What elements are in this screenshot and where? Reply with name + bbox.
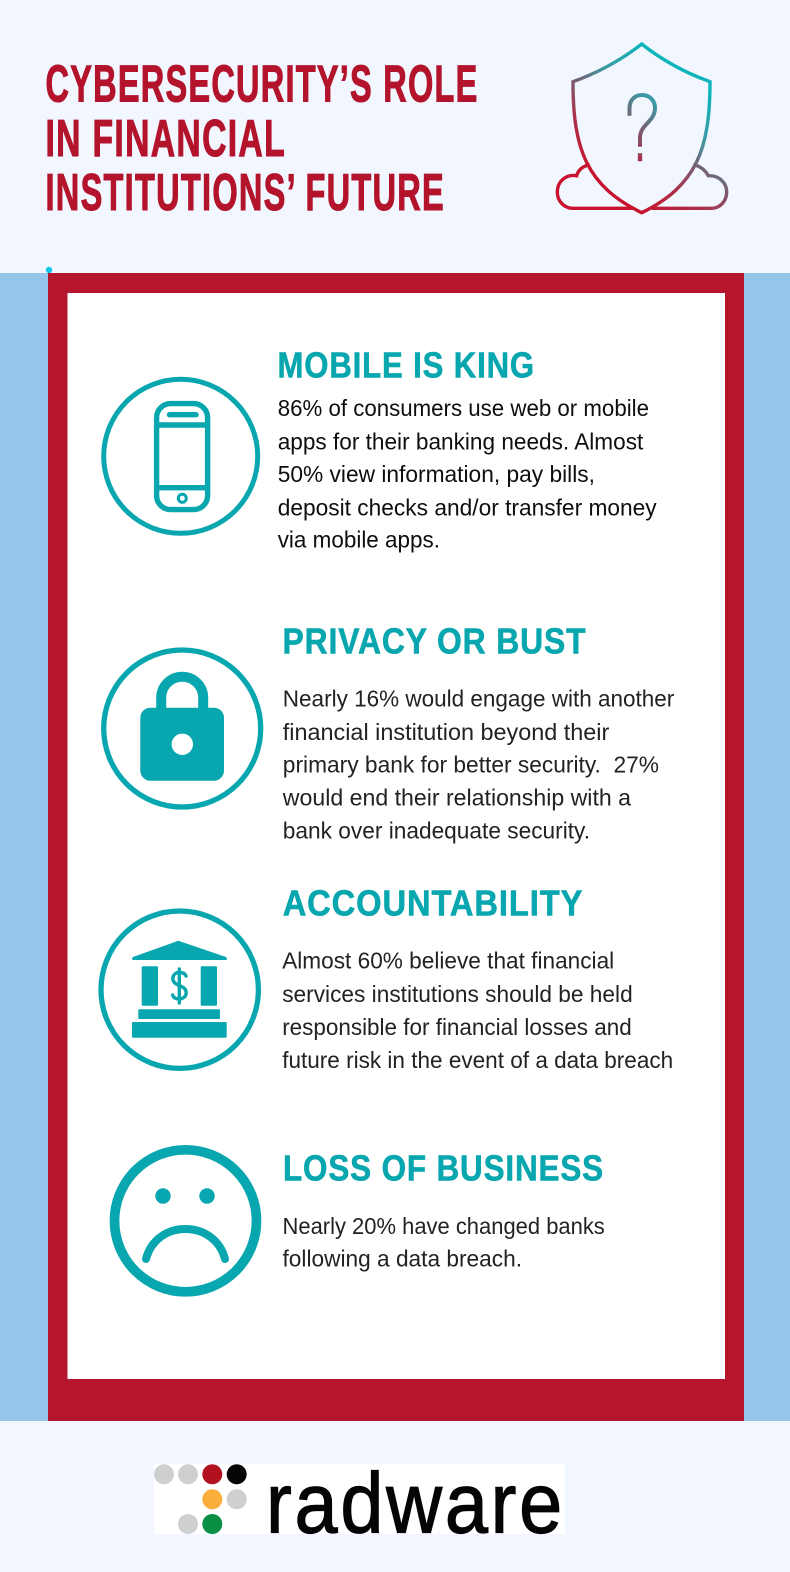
panel: mobile is king [104, 345, 657, 553]
body text [278, 395, 657, 553]
body text: services institutions should be held [282, 981, 633, 1007]
panel: privacy or bust [104, 620, 675, 844]
body text [282, 686, 675, 844]
title [46, 56, 478, 222]
logo: radware [154, 1456, 565, 1552]
icon: padlock [104, 650, 261, 807]
heading: ACCOUNTABILITY [283, 883, 583, 924]
heading: PRIVACY OR BUST [282, 620, 586, 661]
body text: primary bank for better security. 27% [283, 752, 659, 778]
body text: 50% view information, pay bills, [278, 461, 595, 487]
body text: financial institution beyond their [283, 719, 610, 745]
heading: MOBILE IS KING [278, 345, 535, 386]
panel: loss of business [114, 1148, 605, 1292]
body text [282, 948, 673, 1073]
body text [282, 1213, 605, 1272]
logo: radware: radware [266, 1456, 565, 1552]
body text: via mobile apps. [278, 527, 440, 553]
body text: future risk in the event of a data breach [282, 1047, 673, 1073]
body text: bank over inadequate security. [283, 818, 590, 844]
body text: Almost 60% believe that financial [282, 948, 614, 974]
white content panel [68, 293, 725, 1379]
heading: LOSS OF BUSINESS [283, 1148, 604, 1189]
decorative dot [46, 267, 52, 273]
body text: would end their relationship with a [282, 785, 631, 811]
red frame [48, 273, 744, 1421]
body text: 86% of consumers use web or mobile [278, 395, 649, 421]
title: INSTITUTIONS’ FUTURE [46, 164, 445, 222]
icon: bank building [101, 911, 258, 1068]
body text: deposit checks and/or transfer money [278, 494, 657, 520]
side band left [0, 273, 48, 1421]
side band right [744, 273, 790, 1421]
body text: apps for their banking needs. Almost [278, 428, 644, 454]
icon: mobile phone [104, 379, 258, 533]
body text: following a data breach. [282, 1246, 522, 1272]
title: IN FINANCIAL [46, 110, 286, 168]
panel: accountability [101, 883, 673, 1073]
icon: shield with question mark and clouds [557, 44, 727, 213]
title: CYBERSECURITY’S ROLE [46, 56, 478, 114]
body text: responsible for financial losses and [282, 1014, 632, 1040]
icon: sad face [114, 1150, 256, 1292]
body text: Nearly 16% would engage with another [283, 686, 675, 712]
body text: Nearly 20% have changed banks [282, 1213, 605, 1239]
